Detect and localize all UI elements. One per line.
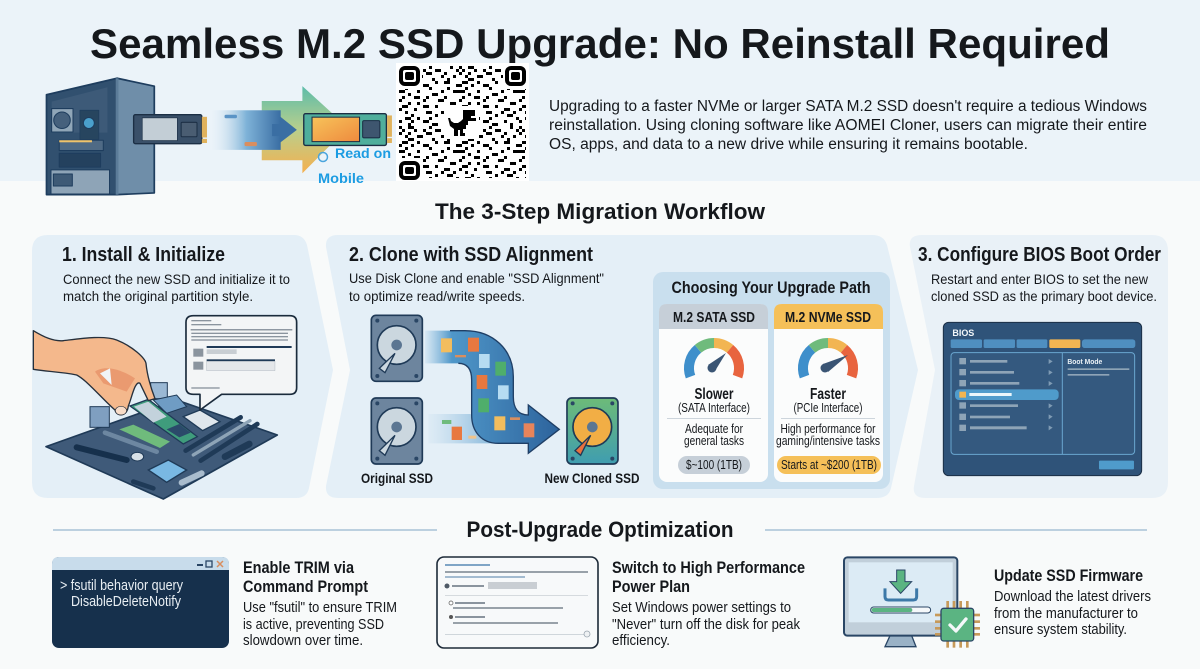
intro text: Upgrading to a faster NVMe or larger SATA M.2 SSD doesn't require a tedious Windows — [549, 98, 1147, 115]
text: step 1 body: Connect the new SSD and initialize it to — [63, 271, 290, 287]
illustration: clone flow — [371, 315, 618, 464]
arrow: big gradient arrow — [212, 86, 348, 173]
heading: power plan: Switch to High Performance — [612, 558, 805, 577]
tip: enable TRIM — [52, 557, 397, 649]
card: NVMe: Faster — [810, 386, 846, 403]
panel: step 2 clone — [326, 235, 918, 498]
illustration: BIOS screen: BIOS — [952, 328, 974, 338]
read on mobile link: Mobile — [318, 171, 365, 186]
gauge: NVMe faster — [803, 343, 853, 377]
text: TRIM body: slowdown over time. — [243, 633, 363, 649]
icon: PC tower — [46, 78, 154, 195]
text: step 1 body — [63, 271, 290, 304]
QR finder patterns — [396, 63, 529, 181]
text: step 3 body: cloned SSD as the primary boot device. — [931, 288, 1157, 304]
card: NVMe — [774, 304, 883, 482]
card: SATA — [659, 304, 768, 482]
label: original SSD: Original SSD — [361, 470, 433, 486]
heading: firmware: Update SSD Firmware — [994, 566, 1143, 585]
card: NVMe: M.2 NVMe SSD — [785, 310, 871, 326]
illustration: hand installing SSD on motherboard — [33, 331, 277, 499]
pill: NVMe price: Starts at ~$200 (1TB) — [781, 458, 877, 472]
text: firmware body — [994, 589, 1151, 638]
text: step 2 body: Use Disk Clone and enable "SSD Alignment" — [349, 270, 604, 286]
icon: new SSD — [304, 114, 392, 145]
heading: step 2: 2. Clone with SSD Alignment — [349, 244, 593, 266]
card: SATA: general tasks — [684, 434, 744, 448]
heading: step 1: 1. Install & Initialize — [62, 244, 225, 266]
illustration: BIOS screen: Boot Mode — [1067, 359, 1102, 366]
heading: TRIM: Command Prompt — [243, 577, 368, 596]
intro text: OS, apps, and data to a new drive while ensuring it remains bootable. — [549, 136, 1028, 153]
text: firmware body: from the manufacturer to — [994, 606, 1138, 622]
text: power plan body: "Never" turn off the disk for peak — [612, 617, 801, 633]
gauge: SATA slower — [689, 343, 739, 377]
callout: disk management window — [186, 316, 297, 410]
heading: power plan: Power Plan — [612, 577, 690, 596]
panel: step 3 BIOS — [910, 235, 1168, 498]
card: SATA: (SATA Interface) — [678, 401, 750, 415]
icon: old SSD — [134, 115, 207, 144]
pill: SATA price — [678, 456, 750, 474]
text: step 3 body: Restart and enter BIOS to set the new — [931, 271, 1149, 287]
tip: update SSD firmware — [844, 557, 1151, 648]
icon: original SSD bottom — [371, 398, 422, 464]
read on mobile link: Read on — [335, 146, 391, 161]
arrow: lower faded stream — [428, 414, 497, 443]
text: step 2 body — [349, 270, 604, 304]
pill: SATA price: $~100 (1TB) — [686, 458, 742, 472]
panel: step 1 install — [32, 235, 333, 499]
card: SATA: M.2 SATA SSD — [673, 310, 755, 326]
text: step 1 body: match the original partition style. — [63, 288, 253, 304]
section heading: post-upgrade optimization: Post-Upgrade Optimization — [466, 517, 734, 542]
text: step 2 body: to optimize read/write speeds. — [349, 288, 525, 304]
hero illustration: PC to new SSD — [46, 78, 392, 195]
heading: step 3: 3. Configure BIOS Boot Order — [918, 244, 1161, 266]
text: TRIM body: is active, preventing SSD — [243, 617, 384, 633]
arrow: clone stream — [425, 331, 559, 453]
text: power plan body — [612, 600, 801, 649]
text: TRIM body — [243, 600, 397, 649]
text: firmware body: ensure system stability. — [994, 622, 1127, 638]
tip: high performance power plan — [437, 557, 805, 649]
text: power plan body: Set Windows power settings to — [612, 600, 791, 616]
read on mobile link — [318, 146, 391, 186]
text: step 3 body — [931, 271, 1157, 304]
QR dinosaur — [444, 106, 479, 139]
label: new cloned SSD: New Cloned SSD — [544, 470, 640, 486]
icons: moving files — [441, 338, 534, 440]
panel: choosing your upgrade path — [653, 272, 890, 489]
text: TRIM body: Use "fsutil" to ensure TRIM — [243, 600, 397, 616]
icon: original SSD top — [371, 315, 422, 381]
pill: NVMe price — [777, 456, 881, 474]
icon: terminal window: DisableDeleteNotify — [71, 594, 182, 610]
card: NVMe: High performance for — [780, 422, 876, 436]
title: Seamless M.2 SSD Upgrade: No Reinstall Required — [90, 20, 1110, 67]
icon: new cloned SSD — [567, 398, 618, 464]
illustration: BIOS screen — [943, 322, 1142, 476]
heading: TRIM: Enable TRIM via — [243, 558, 354, 577]
icon: power settings window — [437, 557, 598, 648]
heading: upgrade path: Choosing Your Upgrade Path — [672, 279, 870, 297]
intro text: reinstallation. Using cloning software like AOMEI Cloner, users can migrate their entire — [549, 117, 1147, 134]
icon: terminal window: > fsutil behavior query — [60, 578, 184, 594]
text: firmware body: Download the latest drivers — [994, 589, 1151, 605]
heading: power plan — [612, 558, 805, 596]
text: power plan body: efficiency. — [612, 633, 670, 649]
card: NVMe: (PCIe Interface) — [794, 401, 862, 415]
card: SATA: Adequate for — [685, 422, 743, 436]
intro text — [549, 98, 1147, 153]
card: NVMe: gaming/intensive tasks — [776, 434, 880, 448]
QR code — [396, 63, 529, 181]
heading: TRIM — [243, 558, 368, 596]
card: SATA: Slower — [694, 386, 734, 403]
section heading: workflow: The 3-Step Migration Workflow — [435, 199, 766, 224]
icon: terminal window — [52, 557, 229, 648]
icon: monitor with chip — [844, 557, 980, 648]
